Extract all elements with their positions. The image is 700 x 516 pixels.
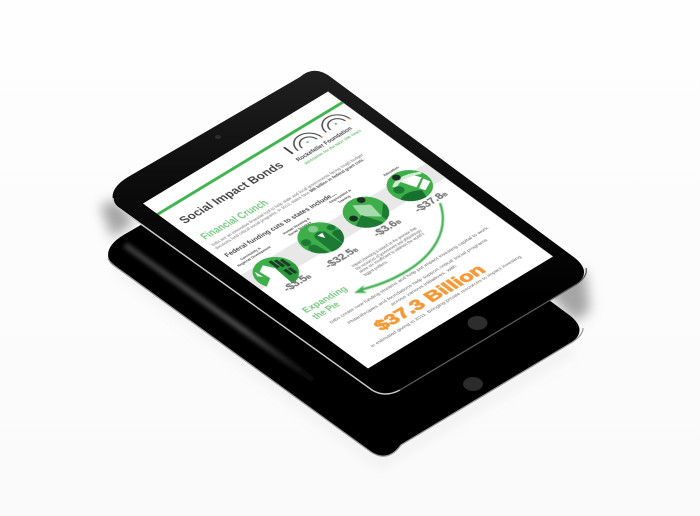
lower tablet <box>108 130 583 456</box>
impact investing note: Impact investing is based on the premise that <box>350 226 419 268</box>
icon: employment <box>342 196 390 228</box>
silver rim <box>113 198 400 394</box>
logo wordmark: Rockefeller Foundation <box>294 126 354 163</box>
logo arches <box>287 129 321 151</box>
column labels: Training <box>337 195 352 204</box>
impact investing note: biggest problems. <box>362 260 389 277</box>
lower tablet silver rim <box>108 258 583 456</box>
logo numeral bar <box>283 147 294 154</box>
funding amounts: -$3.6B <box>370 217 405 239</box>
logo tagline: Innovation for the Next 100 Years <box>303 128 363 166</box>
lower home button <box>463 377 483 391</box>
tablet mockup scene <box>96 70 596 462</box>
federal funding heading: Federal funding cuts to states include... <box>223 191 339 258</box>
column labels: Human Housing & <box>282 217 311 235</box>
impact investing note: the resources of government and philanthropy <box>354 228 423 271</box>
title: Social Impact Bonds <box>176 159 287 226</box>
soft shadows <box>100 200 590 468</box>
icon: education <box>386 170 434 202</box>
gray band <box>241 163 446 290</box>
funding amounts: -$32.5B <box>322 245 362 270</box>
funding amounts <box>280 189 452 295</box>
home button <box>468 316 488 330</box>
camera <box>215 135 221 139</box>
body copy: Philanthropies and foundations help support critical social programs <box>346 238 490 325</box>
upper tablet <box>113 71 586 394</box>
column labels: Education <box>382 166 400 177</box>
funding amounts: -$3.5B <box>280 272 315 294</box>
body copy: across various initiatives, with <box>389 264 459 307</box>
icon: community <box>252 256 300 288</box>
arrow: funding flow <box>354 203 443 293</box>
body copy: SIBs create new funding streams and help put impact investing capital to work. <box>328 225 491 325</box>
icon: housing <box>297 222 344 254</box>
closing line: in estimated giving in 2011. Bringing private resources to impact investing <box>369 254 523 349</box>
column labels: Community & <box>239 246 262 261</box>
intro paragraph: SIBs are an innovative financial tool to help state and local governments facing tough budget <box>210 152 365 247</box>
lower tablet reflection band <box>125 245 320 385</box>
impact investing note: alone are insufficient to address the world's <box>358 232 426 274</box>
financial crunch heading: Financial Crunch <box>198 198 271 242</box>
body copy <box>328 225 506 335</box>
column labels: Social Services <box>287 221 313 237</box>
funding amounts: -$37.8B <box>411 189 451 214</box>
expanding the pie heading: Expanding <box>300 285 351 315</box>
column labels <box>230 163 402 268</box>
column labels: Employment & <box>328 189 353 204</box>
dark rim <box>400 268 586 390</box>
logo <box>279 110 367 167</box>
screen <box>143 92 553 368</box>
big number: $37.3 Billion <box>369 261 490 334</box>
intro paragraph: decisions fund critical social programs. In 2013, states face $85 billion in federal grant cuts. <box>214 158 366 250</box>
green header bar <box>156 101 344 215</box>
column labels: Regional Development <box>237 245 273 268</box>
expanding the pie heading: the Pie <box>310 300 344 321</box>
